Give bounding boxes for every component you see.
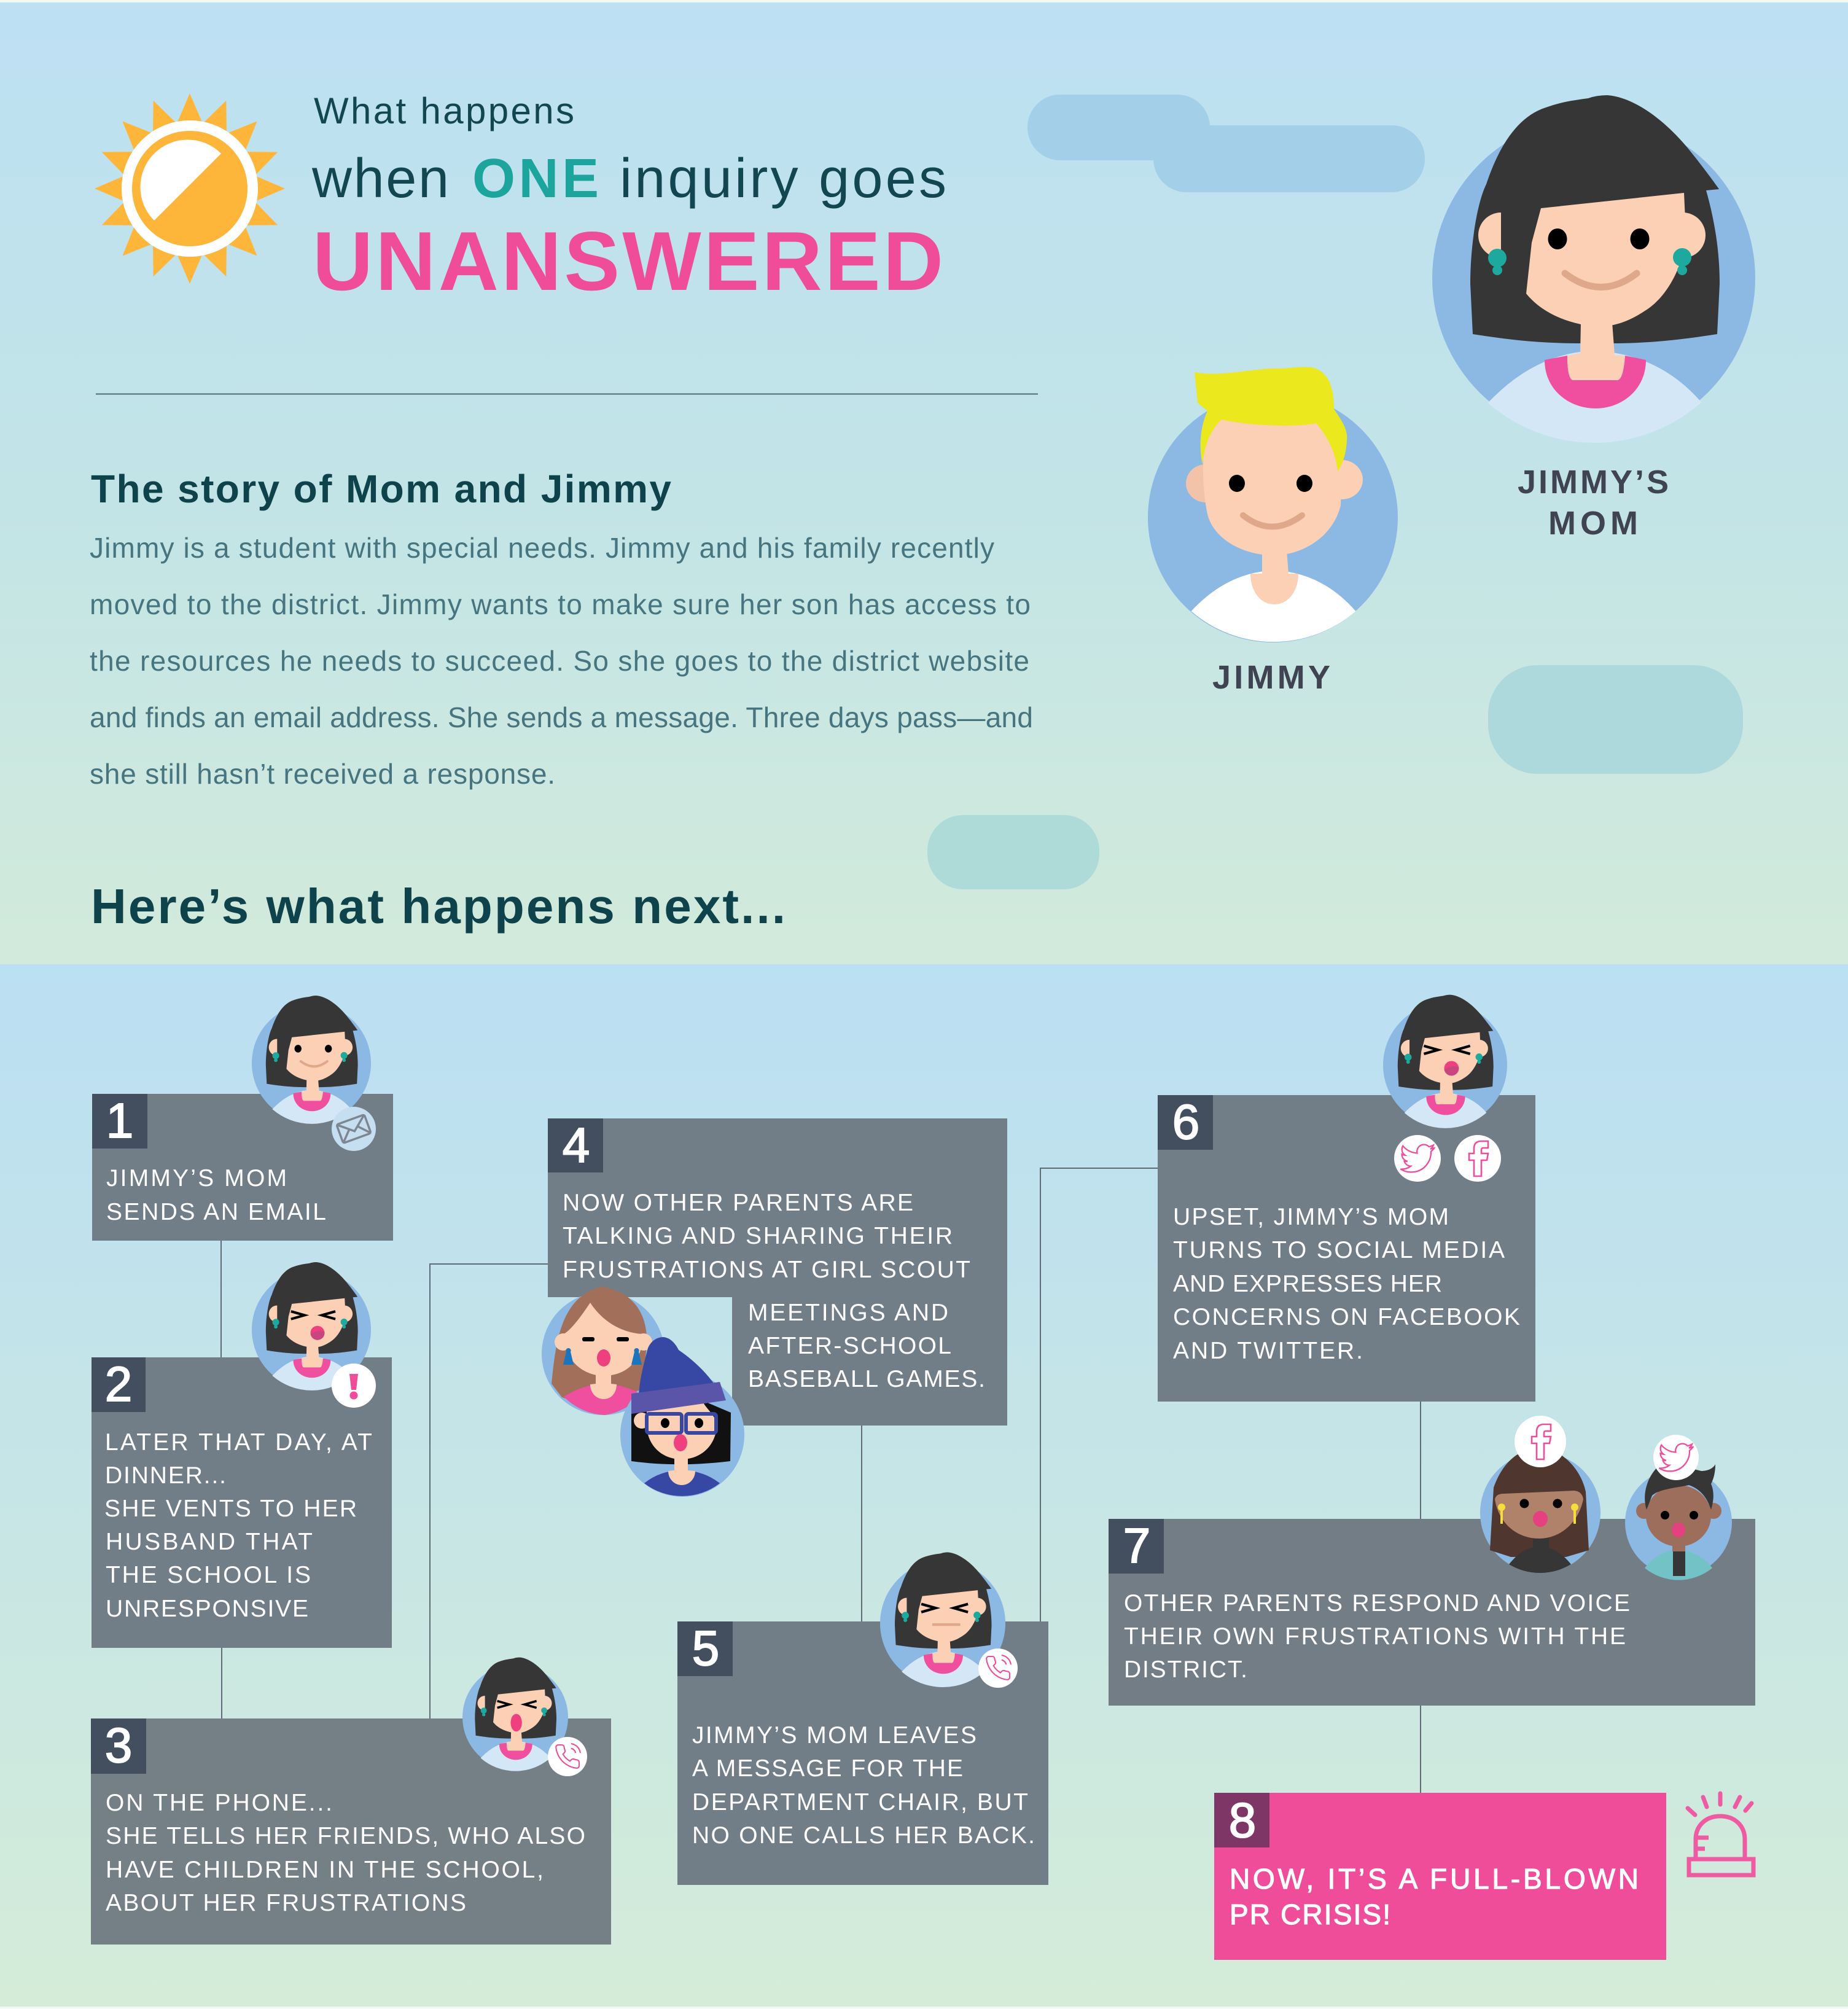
story text block: moved to the district. Jimmy wants to make sure her son has access to bbox=[90, 588, 1031, 620]
connector lines between steps bbox=[221, 1168, 1421, 1793]
heading: the story: The story of Mom and Jimmy bbox=[91, 467, 671, 511]
icon: facebook badge bbox=[1515, 1416, 1566, 1467]
panel: step 5: DEPARTMENT CHAIR, BUT bbox=[692, 1789, 1028, 1816]
panel: step 2: UNRESPONSIVE bbox=[106, 1596, 308, 1622]
label: Jimmy's mom: MOM bbox=[1548, 505, 1638, 542]
panel: step 5 bbox=[677, 1552, 1048, 1885]
panel: step 7 bbox=[1109, 1416, 1755, 1706]
background clouds bbox=[927, 95, 1743, 889]
icon: twitter badge bbox=[1394, 1135, 1441, 1182]
story text block: the resources he needs to succeed. So she goes to the district website bbox=[90, 645, 1029, 677]
icon: upset mom venting bbox=[252, 1262, 371, 1391]
panel: step 8: 8 bbox=[1229, 1793, 1256, 1847]
panel: step 1: 1 bbox=[106, 1093, 133, 1148]
panel: step 3: 3 bbox=[105, 1718, 132, 1773]
panel: step 4: NOW OTHER PARENTS ARE bbox=[563, 1190, 913, 1216]
icon: facebook badge bbox=[1454, 1135, 1501, 1182]
icon: mom on the phone bbox=[462, 1658, 568, 1771]
panel: step 6: UPSET, JIMMY’S MOM bbox=[1173, 1204, 1449, 1230]
panel: step 4 bbox=[542, 1118, 1007, 1497]
panel: step 6: 6 bbox=[1172, 1094, 1199, 1149]
panel: step 1: SENDS AN EMAIL bbox=[106, 1199, 326, 1225]
title: when bbox=[311, 148, 449, 209]
icon: twitter badge bbox=[1653, 1435, 1699, 1480]
panel: step 7: DISTRICT. bbox=[1124, 1656, 1247, 1683]
icon: mom sending email bbox=[252, 996, 371, 1124]
label: Jimmy's mom bbox=[1518, 464, 1669, 542]
panel: step 6: CONCERNS ON FACEBOOK bbox=[1173, 1304, 1520, 1330]
icon: parent with beanie and glasses bbox=[620, 1337, 744, 1497]
panel: step 7: 7 bbox=[1123, 1518, 1150, 1573]
panel: step 2: DINNER... bbox=[105, 1462, 226, 1489]
icon: mom shouting on social media bbox=[1383, 995, 1507, 1128]
heading: what happens next: Here’s what happens next... bbox=[91, 879, 786, 934]
panel: step 4: AFTER-SCHOOL bbox=[748, 1333, 951, 1359]
panel: step 5: JIMMY’S MOM LEAVES bbox=[692, 1722, 977, 1749]
icon: envelope badge bbox=[332, 1107, 376, 1151]
panel: step 1: JIMMY’S MOM bbox=[106, 1165, 287, 1192]
title: ONE bbox=[472, 148, 599, 209]
panel: step 4: 4 bbox=[563, 1118, 590, 1172]
panel: step 2: LATER THAT DAY, AT bbox=[105, 1429, 372, 1456]
panel: step 3: ABOUT HER FRUSTRATIONS bbox=[106, 1890, 466, 1916]
panel: step 4: TALKING AND SHARING THEIR bbox=[563, 1223, 953, 1249]
panel: step 6: AND EXPRESSES HER bbox=[1173, 1271, 1442, 1297]
icon: phone badge bbox=[548, 1737, 587, 1776]
panel: step 7: THEIR OWN FRUSTRATIONS WITH THE bbox=[1124, 1623, 1626, 1650]
panel: step 2: SHE VENTS TO HER bbox=[104, 1496, 357, 1522]
title: UNANSWERED bbox=[313, 214, 943, 308]
panel: step 3: ON THE PHONE... bbox=[106, 1790, 332, 1816]
icon: parent with brown hair bbox=[542, 1287, 665, 1415]
panel: step 4: FRUSTRATIONS AT GIRL SCOUT bbox=[563, 1257, 970, 1283]
story text block: Jimmy is a student with special needs. Jimmy and his family recently bbox=[90, 532, 994, 564]
panel: step 8: NOW, IT’S A FULL-BLOWN bbox=[1230, 1863, 1639, 1895]
icon: parent with short hair bbox=[1625, 1462, 1732, 1580]
panel: step 2: 2 bbox=[105, 1357, 132, 1411]
portrait: Jimmy bbox=[1148, 367, 1398, 642]
title: What happens bbox=[314, 90, 574, 131]
panel: step 2 bbox=[92, 1262, 392, 1648]
panel: step 6: TURNS TO SOCIAL MEDIA bbox=[1173, 1237, 1505, 1263]
panel: step 1 bbox=[92, 996, 393, 1241]
panel: step 5: A MESSAGE FOR THE bbox=[692, 1755, 963, 1782]
story text block bbox=[90, 532, 1033, 790]
icon: exclamation badge bbox=[332, 1363, 376, 1408]
story text block: she still hasn’t received a response. bbox=[90, 758, 555, 790]
panel: step 2: HUSBAND THAT bbox=[106, 1529, 313, 1555]
panel: step 3: HAVE CHILDREN IN THE SCHOOL, bbox=[106, 1857, 544, 1883]
panel: step 5: 5 bbox=[692, 1621, 719, 1675]
title bbox=[311, 90, 946, 308]
panel: step 8: PR CRISIS! bbox=[1230, 1898, 1390, 1930]
panel: step 4: MEETINGS AND bbox=[748, 1300, 948, 1326]
panel: step 3 bbox=[91, 1658, 611, 1945]
icon: alarm siren bbox=[1688, 1793, 1753, 1875]
panel: step 3: SHE TELLS HER FRIENDS, WHO ALSO bbox=[106, 1823, 585, 1849]
icon: frustrated mom bbox=[880, 1552, 1005, 1687]
panel: step 5: NO ONE CALLS HER BACK. bbox=[692, 1822, 1035, 1849]
icon: sun logo bbox=[95, 93, 285, 284]
panel: step 7: OTHER PARENTS RESPOND AND VOICE bbox=[1124, 1590, 1630, 1617]
icon: phone badge bbox=[978, 1648, 1018, 1688]
icon: parent with brown skin and long hair bbox=[1480, 1448, 1600, 1573]
label: Jimmy: JIMMY bbox=[1212, 659, 1330, 696]
panel: step 6: AND TWITTER. bbox=[1173, 1338, 1363, 1364]
label: Jimmy's mom: JIMMY’S bbox=[1518, 464, 1669, 501]
title: inquiry goes bbox=[620, 148, 946, 209]
panel: step 4: BASEBALL GAMES. bbox=[748, 1366, 985, 1392]
panel: step 8 bbox=[1214, 1793, 1666, 1960]
portrait: Jimmy's mom bbox=[1432, 95, 1755, 442]
panel: step 6 bbox=[1158, 995, 1535, 1402]
panel: step 2: THE SCHOOL IS bbox=[106, 1562, 311, 1588]
story text block: and finds an email address. She sends a message. Three days pass—and bbox=[90, 701, 1033, 733]
